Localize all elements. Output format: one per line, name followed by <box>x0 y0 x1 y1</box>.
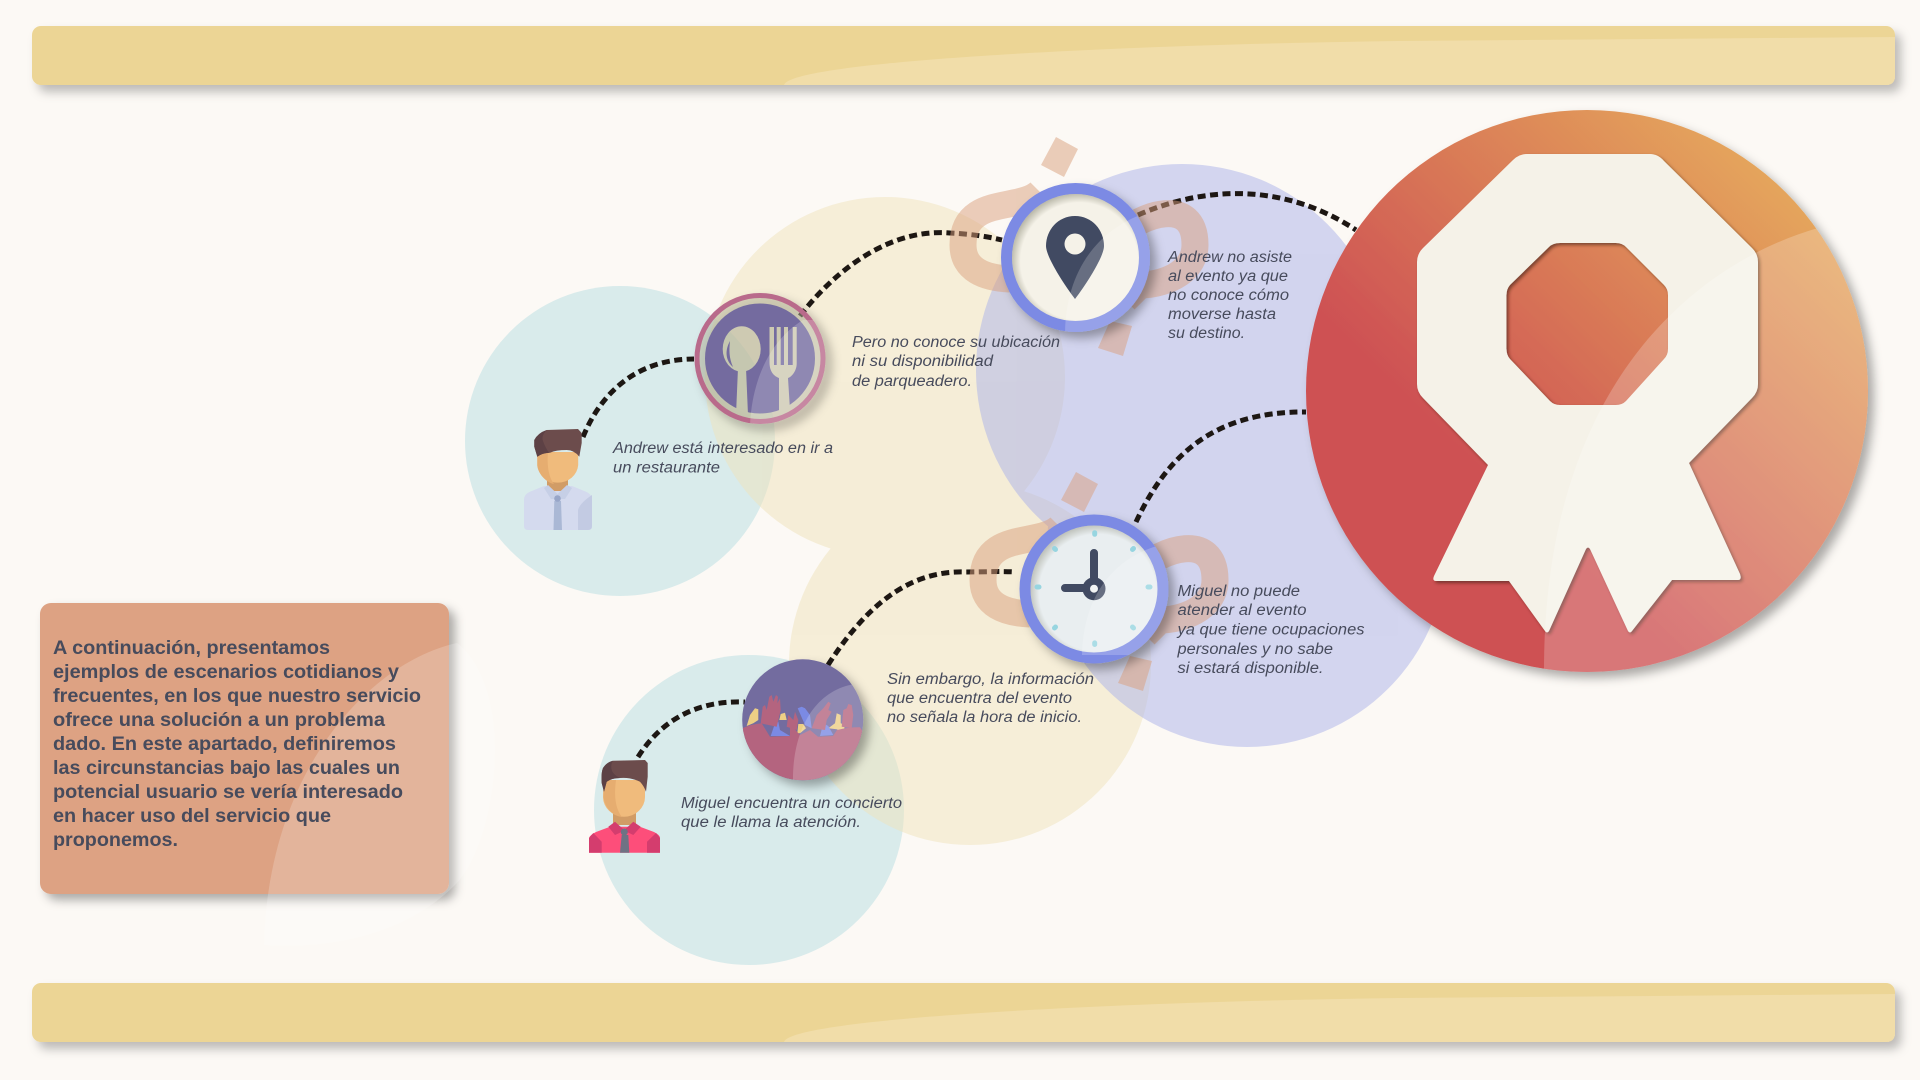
lavender background circles <box>976 164 1447 747</box>
text: introduction paragraph: las circunstancias bajo las cuales un <box>53 757 400 779</box>
text: Andrew interested: un restaurante <box>613 460 720 476</box>
text: unknown location: de parqueadero. <box>852 373 972 390</box>
text: introduction paragraph <box>53 637 421 851</box>
text: unknown location <box>852 334 1060 390</box>
text: introduction paragraph: ejemplos de escenarios cotidianos y <box>53 661 399 683</box>
icon: Andrew person <box>524 429 592 530</box>
icon: clock <box>1025 520 1170 658</box>
text: Miguel finds concert <box>681 795 902 831</box>
text: introduction paragraph: en hacer uso del servicio que <box>53 805 331 827</box>
text: missing time <box>887 671 1094 726</box>
text: Miguel cannot attend <box>1176 583 1365 677</box>
text: Miguel cannot attend: Miguel no puede <box>1178 583 1300 600</box>
text: Andrew does not attend <box>1167 249 1292 342</box>
panel: introduction <box>40 603 495 946</box>
top banner <box>32 26 1895 85</box>
text: Miguel cannot attend: personales y no sabe <box>1176 641 1333 658</box>
dotted paths <box>583 194 1356 757</box>
icon: location pin <box>1006 188 1160 335</box>
icon: badge medal <box>1306 110 1900 700</box>
text: Andrew interested <box>612 440 833 476</box>
text: Andrew does not attend: no conoce cómo <box>1168 287 1289 304</box>
text: Miguel cannot attend: atender al evento <box>1178 602 1307 619</box>
icon: Miguel person <box>589 760 660 853</box>
text: missing time: no señala la hora de inicio. <box>887 709 1082 726</box>
question mark decoration: clock <box>983 472 1215 691</box>
question mark decoration: location <box>963 137 1195 356</box>
bottom banner <box>32 983 1895 1042</box>
text: introduction paragraph: proponemos. <box>53 829 178 851</box>
text: Andrew does not attend: moverse hasta <box>1168 306 1276 323</box>
text: introduction paragraph: frecuentes, en los que nuestro servicio <box>53 685 421 707</box>
text: introduction paragraph: potencial usuario se vería interesado <box>53 781 403 803</box>
text: missing time: que encuentra del evento <box>887 690 1072 707</box>
text: Andrew does not attend: al evento ya que <box>1168 268 1288 285</box>
cream background circles <box>705 197 1151 845</box>
text: Miguel finds concert: Miguel encuentra un concierto <box>681 795 902 812</box>
text: Miguel cannot attend: ya que tiene ocupaciones <box>1176 622 1365 638</box>
teal background circles <box>465 286 904 965</box>
text: Andrew interested: Andrew está interesado en ir a <box>612 440 833 457</box>
text: Andrew does not attend: su destino. <box>1168 325 1245 342</box>
text: introduction paragraph: dado. En este apartado, definiremos <box>53 733 396 755</box>
text: unknown location: Pero no conoce su ubicación <box>852 334 1060 351</box>
icon: restaurant cutlery <box>697 296 830 425</box>
text: introduction paragraph: ofrece una solución a un problema <box>53 709 385 731</box>
text: Miguel cannot attend: si estará disponible. <box>1178 660 1324 677</box>
text: introduction paragraph: A continuación, presentamos <box>53 637 330 659</box>
text: unknown location: ni su disponibilidad <box>852 353 994 370</box>
text: Miguel finds concert: que le llama la atención. <box>681 814 861 831</box>
text: missing time: Sin embargo, la información <box>887 671 1094 688</box>
text: Andrew does not attend: Andrew no asiste <box>1167 249 1292 266</box>
icon: concert crowd <box>740 659 870 790</box>
